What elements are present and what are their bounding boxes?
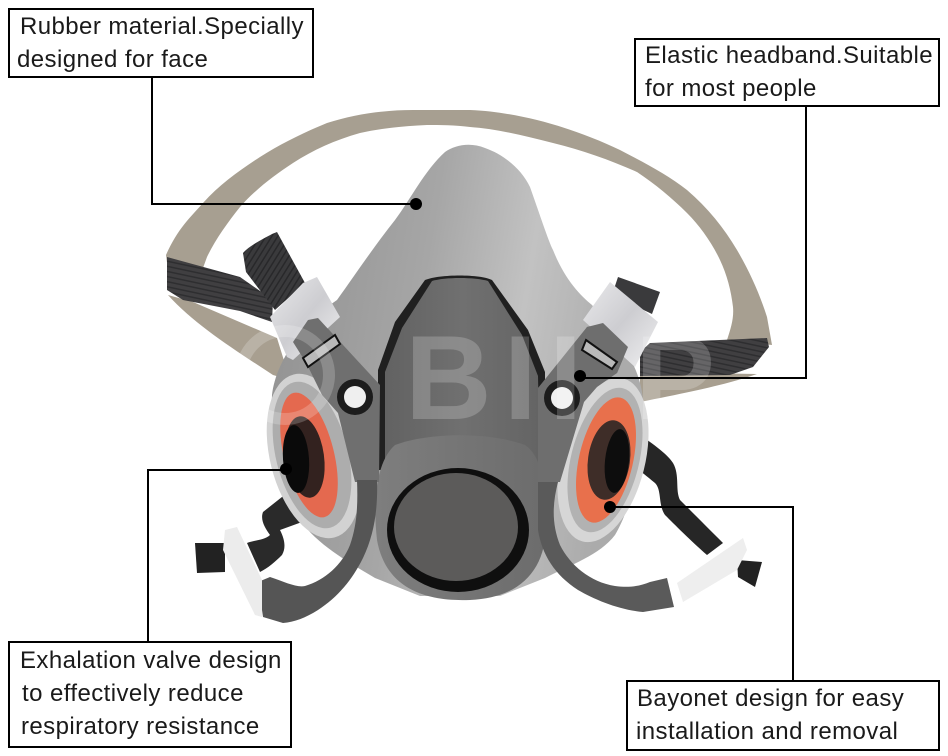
mask body: grey rubber face piece bbox=[272, 145, 644, 596]
filter holder bbox=[375, 435, 546, 600]
right clear buckle bottom bbox=[677, 538, 747, 602]
callout: elastic headband bbox=[634, 38, 940, 107]
left lower yoke strap bbox=[258, 480, 377, 623]
left cartridge cup bbox=[251, 364, 377, 548]
right buckle slot bbox=[582, 340, 617, 369]
watermark: P bbox=[635, 311, 715, 445]
left yoke arm bbox=[294, 318, 380, 482]
left arm tip over buckle bbox=[293, 318, 352, 385]
elastic strap: upper left bbox=[167, 232, 305, 322]
filter holder ring bbox=[387, 468, 529, 592]
elastic strap: lower left bbox=[195, 493, 302, 573]
callout: exhalation valve bbox=[8, 641, 292, 748]
elastic strap: lower right bbox=[632, 433, 762, 587]
left buckle slot bbox=[303, 335, 340, 367]
right orange gasket bbox=[565, 392, 647, 528]
callout: exhalation valve: to effectively reduce bbox=[22, 680, 244, 707]
leader line: rubber material bbox=[152, 77, 422, 210]
right cartridge cup bbox=[542, 368, 664, 552]
right arm tip over buckle bbox=[570, 323, 628, 384]
head strap: tan upper band bbox=[166, 110, 772, 402]
callout: rubber material: Rubber material.Specially bbox=[20, 13, 304, 40]
watermark bbox=[241, 311, 715, 445]
callout: exhalation valve: respiratory resistance bbox=[21, 713, 260, 740]
left valve button bbox=[337, 379, 373, 415]
head strap: lower left band bbox=[168, 295, 290, 380]
callout: elastic headband: Elastic headband.Suitable bbox=[645, 42, 933, 69]
left clear buckle bottom bbox=[223, 527, 262, 617]
callout: elastic headband: for most people bbox=[645, 75, 817, 102]
elastic strap: upper right bbox=[612, 277, 769, 376]
central dark panel bbox=[378, 276, 545, 470]
callout: rubber material bbox=[8, 8, 314, 78]
callout: rubber material: designed for face bbox=[17, 46, 208, 73]
right cartridge port bbox=[583, 417, 635, 503]
head strap: lower right band bbox=[640, 372, 757, 402]
left cartridge port bbox=[280, 414, 330, 500]
callout: bayonet design: installation and removal bbox=[636, 718, 898, 745]
right lower yoke strap bbox=[538, 482, 674, 612]
callout: bayonet design: Bayonet design for easy bbox=[637, 685, 904, 712]
callout: bayonet design bbox=[626, 680, 940, 751]
left orange gasket bbox=[269, 387, 349, 523]
right valve button bbox=[544, 380, 580, 416]
left clear buckle top bbox=[270, 277, 340, 360]
leader line: exhalation valve bbox=[148, 463, 292, 641]
callout: exhalation valve: Exhalation valve design bbox=[20, 647, 282, 674]
watermark: BII bbox=[405, 311, 594, 445]
right yoke arm bbox=[538, 323, 628, 482]
leader line: elastic headband bbox=[574, 106, 806, 382]
right clear buckle top bbox=[583, 282, 658, 367]
leader line: bayonet design bbox=[604, 501, 793, 681]
filter cover disc bbox=[394, 473, 518, 581]
